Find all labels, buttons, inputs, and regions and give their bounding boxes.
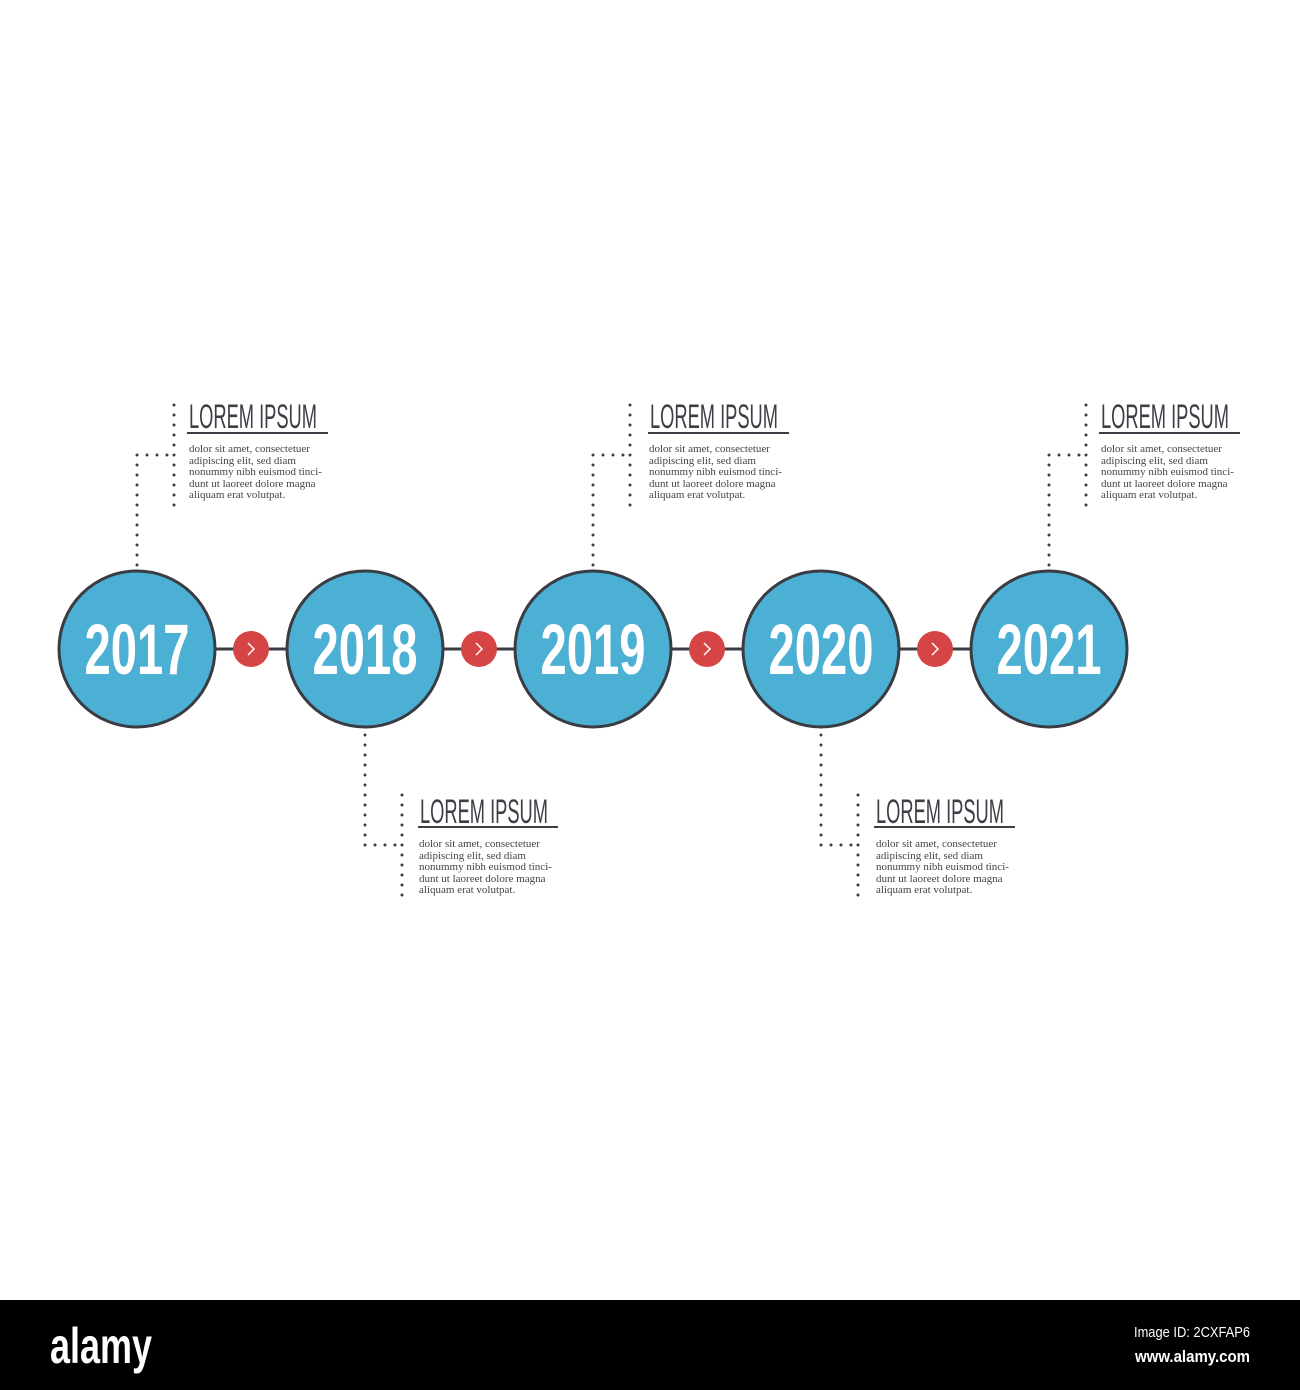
callout bottom 2018: nonummy nibh euismod tinci- bbox=[419, 861, 552, 873]
node 2018 bbox=[287, 571, 443, 727]
callout bottom 2018 bbox=[365, 735, 558, 896]
callout top 2021: dunt ut laoreet dolore magna bbox=[1101, 478, 1228, 490]
arrow marker 4 bbox=[917, 631, 953, 667]
callout top 2017: LOREM IPSUM bbox=[189, 398, 317, 436]
node 2019 bbox=[515, 571, 671, 727]
arrow marker 2 bbox=[461, 631, 497, 667]
callout top 2019: dolor sit amet, consectetuer bbox=[649, 443, 770, 455]
callout top 2021: adipiscing elit, sed diam bbox=[1101, 455, 1208, 467]
callout top 2019: adipiscing elit, sed diam bbox=[649, 455, 756, 467]
callout top 2021: dolor sit amet, consectetuer bbox=[1101, 443, 1222, 455]
node 2020: 2020 bbox=[768, 611, 874, 690]
callout top 2021: nonummy nibh euismod tinci- bbox=[1101, 466, 1234, 478]
callout top 2021 bbox=[1049, 398, 1240, 565]
footer bar: www.alamy.com bbox=[1134, 1347, 1250, 1366]
callout top 2017: aliquam erat volutpat. bbox=[189, 489, 285, 501]
callout top 2017: adipiscing elit, sed diam bbox=[189, 455, 296, 467]
callout bottom 2020: dunt ut laoreet dolore magna bbox=[876, 873, 1003, 885]
arrow marker 1 bbox=[233, 631, 269, 667]
footer bar: alamy bbox=[50, 1318, 152, 1374]
node 2021: 2021 bbox=[996, 611, 1102, 690]
footer bar: Image ID: 2CXFAP6 bbox=[1134, 1324, 1250, 1341]
callout bottom 2020 bbox=[821, 735, 1015, 896]
timeline connector line bbox=[137, 648, 1049, 650]
callout bottom 2020: nonummy nibh euismod tinci- bbox=[876, 861, 1009, 873]
node 2018: 2018 bbox=[312, 611, 418, 690]
node 2017: 2017 bbox=[84, 611, 190, 690]
node 2019: 2019 bbox=[540, 611, 646, 690]
callout top 2017 bbox=[137, 398, 328, 565]
footer bar bbox=[0, 1300, 1300, 1390]
callout bottom 2018: aliquam erat volutpat. bbox=[419, 884, 515, 896]
node 2021 bbox=[971, 571, 1127, 727]
callout bottom 2018: adipiscing elit, sed diam bbox=[419, 850, 526, 862]
callout bottom 2020: LOREM IPSUM bbox=[876, 793, 1004, 831]
node 2020 bbox=[743, 571, 899, 727]
callout top 2019: aliquam erat volutpat. bbox=[649, 489, 745, 501]
callout top 2017: nonummy nibh euismod tinci- bbox=[189, 466, 322, 478]
callout top 2021: aliquam erat volutpat. bbox=[1101, 489, 1197, 501]
callout bottom 2018: dunt ut laoreet dolore magna bbox=[419, 873, 546, 885]
callout bottom 2020: dolor sit amet, consectetuer bbox=[876, 838, 997, 850]
callout top 2019: LOREM IPSUM bbox=[650, 398, 778, 436]
callout top 2019 bbox=[593, 398, 789, 565]
node 2017 bbox=[59, 571, 215, 727]
callout top 2017: dunt ut laoreet dolore magna bbox=[189, 478, 316, 490]
arrow marker 3 bbox=[689, 631, 725, 667]
callout bottom 2018: dolor sit amet, consectetuer bbox=[419, 838, 540, 850]
callout top 2019: dunt ut laoreet dolore magna bbox=[649, 478, 776, 490]
callout bottom 2018: LOREM IPSUM bbox=[420, 793, 548, 831]
callout top 2019: nonummy nibh euismod tinci- bbox=[649, 466, 782, 478]
callout bottom 2020: adipiscing elit, sed diam bbox=[876, 850, 983, 862]
callout top 2017: dolor sit amet, consectetuer bbox=[189, 443, 310, 455]
callout bottom 2020: aliquam erat volutpat. bbox=[876, 884, 972, 896]
